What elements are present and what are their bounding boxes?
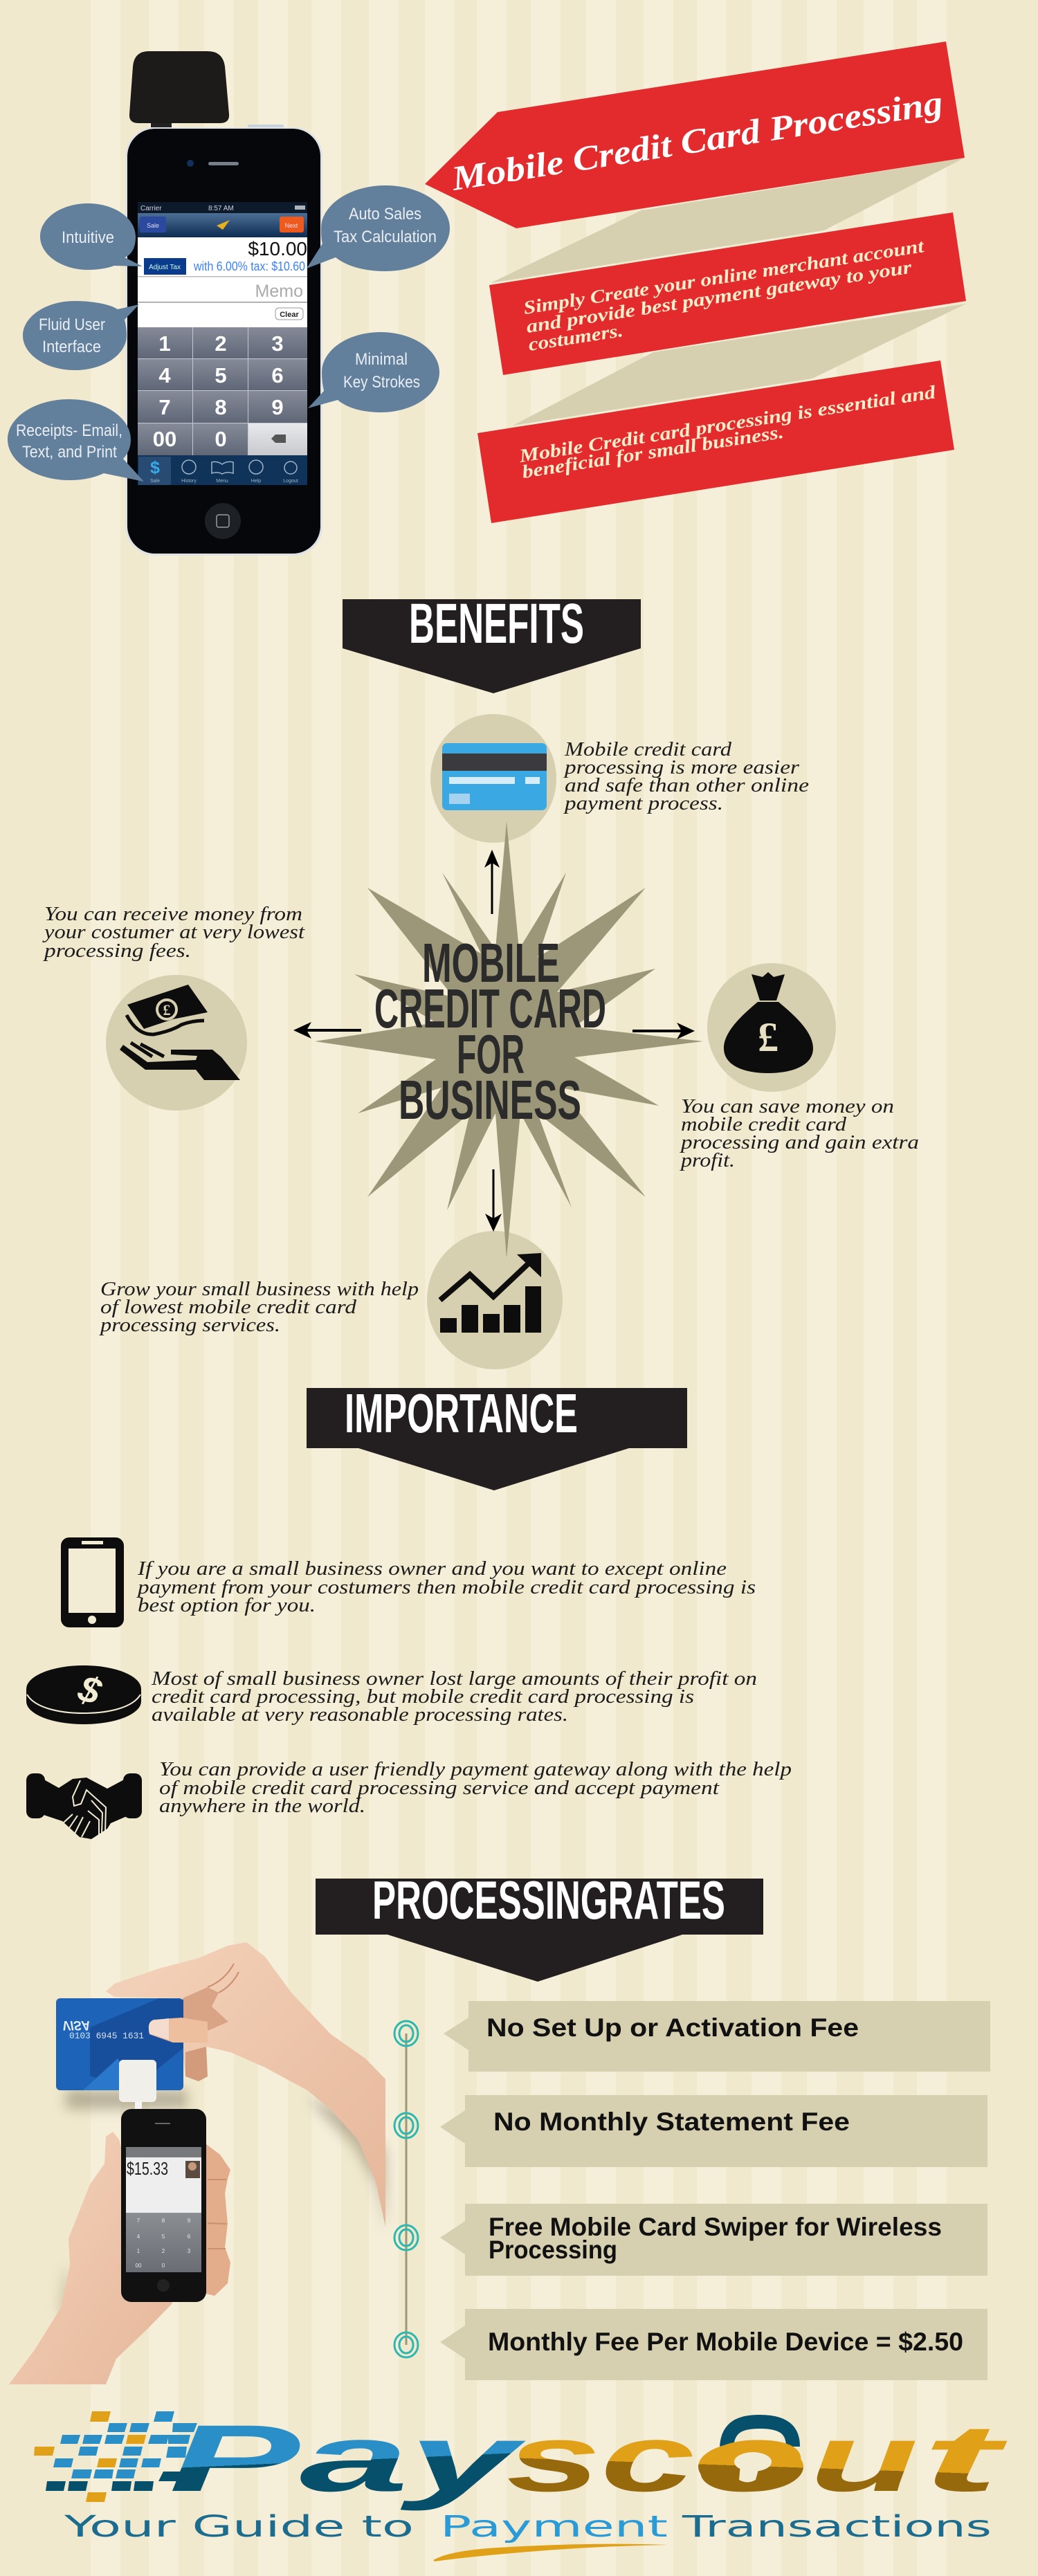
phone status bar: 8:57 AM bbox=[208, 205, 234, 212]
phone keypad: 1 bbox=[158, 331, 171, 356]
rate box 4 bbox=[440, 2309, 987, 2380]
card reader dongle bbox=[129, 51, 284, 128]
importance text 3: anywhere in the world. bbox=[159, 1796, 365, 1817]
small phone: $15.33 bbox=[127, 2158, 168, 2179]
phone amount area bbox=[138, 237, 307, 327]
phone home button bbox=[205, 503, 241, 539]
phone amount area: $10.00 bbox=[248, 238, 307, 259]
importance text 3: of mobile credit card processing service and accept payment bbox=[159, 1778, 720, 1799]
small phone: 1 bbox=[137, 2248, 140, 2254]
benefit text: grow business: Grow your small business with help bbox=[100, 1279, 419, 1300]
phone camera and speaker bbox=[187, 160, 239, 167]
smartphone bbox=[125, 127, 322, 556]
small phone: 5 bbox=[162, 2234, 165, 2240]
rate box 1 bbox=[444, 2001, 990, 2072]
heading: Benefits: BENEFITS bbox=[409, 592, 584, 655]
phone nav bar bbox=[138, 213, 307, 237]
importance text 3 bbox=[159, 1759, 792, 1817]
center title bbox=[374, 932, 606, 1131]
rate box 2: No Monthly Statement Fee bbox=[493, 2108, 850, 2136]
logo wordmark o: o bbox=[695, 2406, 807, 2512]
small phone: 8 bbox=[162, 2218, 165, 2224]
timeline node 3 bbox=[394, 2225, 418, 2250]
phone amount area: Clear bbox=[280, 311, 299, 319]
bubble: Receipts: Text, and Print bbox=[22, 443, 117, 462]
bubble: Auto Sales Tax Calculation: Tax Calculation bbox=[334, 228, 437, 246]
small phone: 6 bbox=[188, 2234, 191, 2240]
phone keypad: 6 bbox=[271, 363, 284, 387]
ribbon: essential text bbox=[477, 360, 954, 523]
benefit circle: hand bbox=[106, 975, 247, 1111]
ribbon: merchant account text: Simply Create your online merchant account bbox=[522, 235, 927, 318]
rate box 3: Processing bbox=[489, 2236, 617, 2264]
logo: Payscout bbox=[34, 2406, 1008, 2512]
benefit text: easier and safe: Mobile credit card bbox=[564, 739, 732, 760]
phone keypad: 4 bbox=[158, 363, 171, 387]
importance text 2: available at very reasonable processing rates. bbox=[152, 1704, 568, 1726]
benefit circle: money bag bbox=[707, 963, 836, 1092]
heading: Processing Rates: PROCESSINGRATES bbox=[372, 1870, 725, 1930]
phone keypad: 0 bbox=[215, 427, 227, 451]
small phone: 0 bbox=[162, 2263, 165, 2269]
benefit text: save money bbox=[680, 1096, 919, 1171]
photo: hands with phone and card reader bbox=[9, 1942, 385, 2384]
importance text 1: best option for you. bbox=[138, 1595, 316, 1616]
benefit text: lowest fees: your costumer at very lowest bbox=[42, 922, 305, 943]
rate box 3 bbox=[440, 2204, 987, 2276]
heading: Importance bbox=[307, 1382, 687, 1490]
logo padlock shackle bbox=[727, 2422, 793, 2447]
bubble: Fluid User Interface: Interface bbox=[42, 338, 101, 356]
small phone: 9 bbox=[188, 2218, 191, 2224]
swoosh bbox=[433, 2544, 668, 2561]
importance text 2 bbox=[151, 1668, 757, 1726]
heading: Processing Rates bbox=[316, 1870, 763, 1982]
ribbon: essential text: beneficial for small business. bbox=[520, 421, 785, 482]
phone status bar: Carrier bbox=[140, 205, 162, 212]
benefit text: easier and safe: and safe than other online bbox=[565, 775, 809, 796]
benefit text: easier and safe bbox=[563, 739, 809, 814]
benefit text: grow business bbox=[99, 1279, 419, 1336]
icon: growth chart bbox=[440, 1253, 541, 1333]
phone tab bar: Logout bbox=[283, 479, 298, 484]
small phone: 2 bbox=[162, 2248, 165, 2254]
phone amount area: Memo bbox=[255, 282, 303, 301]
bubble: Auto Sales Tax Calculation: Auto Sales bbox=[349, 205, 421, 223]
arrow: right bbox=[632, 1023, 695, 1039]
upper hand bbox=[106, 1942, 385, 2227]
icon: hand receiving money: £ bbox=[163, 1001, 170, 1018]
benefit text: easier and safe: payment process. bbox=[563, 793, 723, 814]
phone nav bar: Next bbox=[285, 222, 298, 229]
bubble: Intuitive: Intuitive bbox=[62, 228, 114, 247]
bubble: Minimal Key Strokes bbox=[308, 332, 439, 412]
icon: coin bbox=[26, 1665, 141, 1724]
benefit text: grow business: of lowest mobile credit card bbox=[100, 1297, 357, 1318]
logo wordmark sc: sc bbox=[507, 2406, 695, 2512]
logo lock body with keyhole bbox=[698, 2442, 803, 2492]
phone keypad: 5 bbox=[215, 363, 227, 387]
tagline: Your Guide to bbox=[63, 2510, 414, 2544]
arrow: down bbox=[485, 1169, 502, 1232]
icon: credit card bbox=[442, 743, 547, 810]
bubble: Receipts bbox=[8, 399, 144, 482]
ribbon: merchant account text: costumers. bbox=[527, 320, 624, 355]
phone tab bar bbox=[138, 455, 307, 485]
phone tab bar: $ bbox=[150, 458, 160, 477]
credit card: VISA bbox=[62, 2018, 90, 2032]
icon: coin: $ bbox=[73, 1667, 107, 1713]
phone keypad: 7 bbox=[158, 395, 171, 419]
tagline: Payment bbox=[440, 2510, 668, 2544]
timeline node 2 bbox=[394, 2113, 418, 2138]
phone amount area: Adjust Tax bbox=[149, 264, 181, 271]
importance text 1 bbox=[136, 1558, 756, 1616]
small phone bbox=[121, 2109, 206, 2302]
soft shadows bbox=[59, 2090, 385, 2325]
bubble: Fluid User Interface: Fluid User bbox=[39, 316, 105, 334]
benefit text: grow business: processing services. bbox=[99, 1315, 280, 1336]
ribbon: merchant account text: and provide best payment gateway to your bbox=[525, 257, 913, 337]
icon: smartphone bbox=[61, 1537, 124, 1627]
bubble: Receipts: Receipts- Email, bbox=[16, 421, 122, 440]
phone keypad: 9 bbox=[271, 395, 284, 419]
rate box 1: No Set Up or Activation Fee bbox=[486, 2013, 859, 2042]
starburst bbox=[315, 821, 703, 1258]
importance text 3: You can provide a user friendly payment gateway along with the help bbox=[159, 1759, 792, 1780]
icon: money bag: £ bbox=[758, 1014, 778, 1060]
bubble: Intuitive bbox=[40, 203, 143, 270]
benefit text: save money: mobile credit card bbox=[681, 1114, 847, 1135]
benefit text: save money: profit. bbox=[680, 1150, 735, 1171]
center title: FOR bbox=[457, 1023, 525, 1085]
bubble: Minimal Key Strokes: Minimal bbox=[355, 350, 408, 369]
ribbon fold shadows bbox=[491, 158, 966, 426]
tagline bbox=[63, 2510, 992, 2561]
rate box 4: Monthly Fee Per Mobile Device = $2.50 bbox=[488, 2328, 963, 2356]
small phone: 7 bbox=[137, 2218, 140, 2224]
importance text 2: credit card processing, but mobile credit card processing is bbox=[152, 1686, 694, 1708]
ribbon: essential text: Mobile Credit card processing is essential and bbox=[517, 381, 937, 466]
phone tab bar: Help bbox=[251, 479, 261, 484]
logo wordmark Pay: Pay bbox=[169, 2406, 526, 2512]
phone tab bar: History bbox=[181, 479, 197, 484]
timeline node 1 bbox=[394, 2021, 418, 2046]
benefit circle: card bbox=[430, 714, 556, 843]
tagline: Transactions bbox=[681, 2510, 992, 2544]
phone keypad: 00 bbox=[153, 427, 176, 451]
phone status bar bbox=[138, 202, 307, 213]
importance text 1: payment from your costumers then mobile credit card processing is bbox=[136, 1577, 756, 1598]
importance text 1: If you are a small business owner and you want to except online bbox=[137, 1558, 727, 1580]
heading: Importance: IMPORTANCE bbox=[345, 1382, 578, 1444]
logo wordmark t: t bbox=[922, 2406, 1008, 2512]
ribbon: merchant account text bbox=[489, 212, 966, 375]
center title: MOBILE bbox=[422, 932, 560, 994]
bubble: Auto Sales Tax Calculation bbox=[307, 185, 450, 271]
phone keypad: 2 bbox=[215, 331, 227, 356]
phone keypad: 8 bbox=[215, 395, 227, 419]
timeline node 4 bbox=[394, 2332, 418, 2357]
phone keypad: 3 bbox=[271, 331, 284, 356]
rate box 3: Free Mobile Card Swiper for Wireless bbox=[489, 2213, 942, 2241]
benefit circle: chart bbox=[427, 1231, 563, 1369]
credit card bbox=[56, 1998, 183, 2090]
benefit text: lowest fees: You can receive money from bbox=[44, 904, 302, 925]
center title: CREDIT CARD bbox=[374, 978, 606, 1039]
rate box 2 bbox=[440, 2095, 987, 2167]
bubble: Fluid User Interface bbox=[23, 301, 139, 370]
benefit text: easier and safe: processing is more easier bbox=[563, 757, 799, 778]
phone keypad bbox=[138, 327, 307, 455]
heading: Benefits bbox=[343, 592, 641, 693]
importance text 2: Most of small business owner lost large amounts of their profit on bbox=[151, 1668, 757, 1690]
ribbon: title: Mobile Credit Card Processing bbox=[448, 83, 945, 198]
arrow: up bbox=[484, 850, 500, 914]
benefit text: save money: processing and gain extra bbox=[680, 1132, 919, 1153]
phone tab bar: Sale bbox=[150, 479, 160, 484]
credit card: 0103 6945 1631 bbox=[69, 2031, 144, 2041]
thumb over card bbox=[149, 2018, 208, 2043]
benefit text: lowest fees bbox=[42, 904, 305, 962]
benefit text: lowest fees: processing fees. bbox=[43, 940, 191, 962]
icon: handshake bbox=[26, 1773, 142, 1839]
small phone: 3 bbox=[188, 2248, 191, 2254]
bubble: Minimal Key Strokes: Key Strokes bbox=[343, 373, 420, 392]
small phone: 4 bbox=[137, 2234, 140, 2240]
logo pixel squares bbox=[34, 2411, 197, 2502]
phone nav bar: Sale bbox=[147, 222, 159, 229]
phone tab bar: Menu bbox=[216, 479, 228, 484]
square card reader bbox=[119, 2060, 156, 2109]
finger shading bbox=[183, 1987, 228, 2031]
logo wordmark u: u bbox=[810, 2406, 918, 2512]
timeline bbox=[394, 2021, 418, 2357]
small phone: 00 bbox=[136, 2263, 142, 2269]
ribbon: title bbox=[425, 42, 965, 228]
phone amount area: with 6.00% tax: $10.60 bbox=[193, 259, 305, 273]
arrow: left bbox=[293, 1022, 361, 1039]
icon: hand receiving money bbox=[120, 985, 240, 1080]
icon: money bag bbox=[724, 972, 813, 1073]
benefit text: save money: You can save money on bbox=[681, 1096, 894, 1117]
center title: BUSINESS bbox=[399, 1069, 581, 1131]
lower hand bbox=[9, 2132, 172, 2384]
